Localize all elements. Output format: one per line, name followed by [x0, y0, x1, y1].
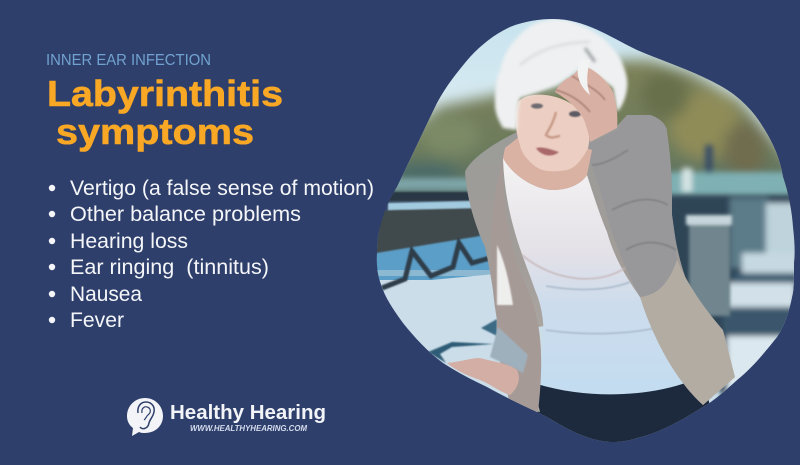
eyebrow heading: INNER EAR INFECTION — [46, 52, 211, 69]
dark trousers — [537, 384, 710, 442]
cardigan back — [465, 115, 735, 412]
face — [516, 95, 589, 171]
post — [686, 215, 732, 316]
logo: Healthy Hearing — [127, 398, 326, 436]
sky — [395, 19, 787, 190]
shirt fold shadows — [522, 255, 655, 334]
title — [47, 73, 283, 152]
website url: WWW.HEALTHYHEARING.COM — [190, 424, 307, 433]
right railing posts and walkway — [668, 196, 800, 401]
white shirt — [503, 158, 688, 394]
symptoms list: Other balance problems — [70, 202, 301, 226]
symptoms list: Ear ringing (tinnitus) — [70, 255, 269, 279]
wordmark: Healthy Hearing — [170, 402, 326, 424]
pavement — [370, 270, 800, 455]
symptoms list: Nausea — [70, 282, 142, 306]
title: Labyrinthitis — [47, 73, 283, 114]
sleeve of raised arm — [612, 115, 677, 297]
neck and chest — [503, 138, 592, 190]
bridge top rail and zigzag supports — [370, 192, 490, 288]
strand of hair over hand — [578, 60, 590, 95]
blurred hills — [370, 60, 800, 200]
cardigan left front panel — [491, 158, 541, 412]
distant water and harbour — [385, 145, 793, 196]
hand on forehead — [555, 65, 617, 142]
sleeve fold lines — [592, 150, 676, 250]
icon: ear speech bubble — [127, 398, 163, 436]
symptoms list — [49, 176, 374, 332]
title: symptoms — [56, 111, 254, 152]
pavement shadows — [428, 319, 497, 363]
lower cardigan right side — [640, 260, 735, 405]
photo: woman with vertigo on a bridge, in blob mask — [370, 10, 800, 455]
symptoms list: Fever — [70, 308, 124, 332]
hand on railing — [447, 358, 519, 395]
water behind railing — [376, 230, 490, 280]
woman — [447, 19, 735, 450]
white hair — [495, 19, 627, 130]
symptoms list: Hearing loss — [70, 229, 188, 253]
eyes, nose and mouth — [531, 103, 581, 155]
symptoms list: Vertigo (a false sense of motion) — [70, 176, 374, 200]
